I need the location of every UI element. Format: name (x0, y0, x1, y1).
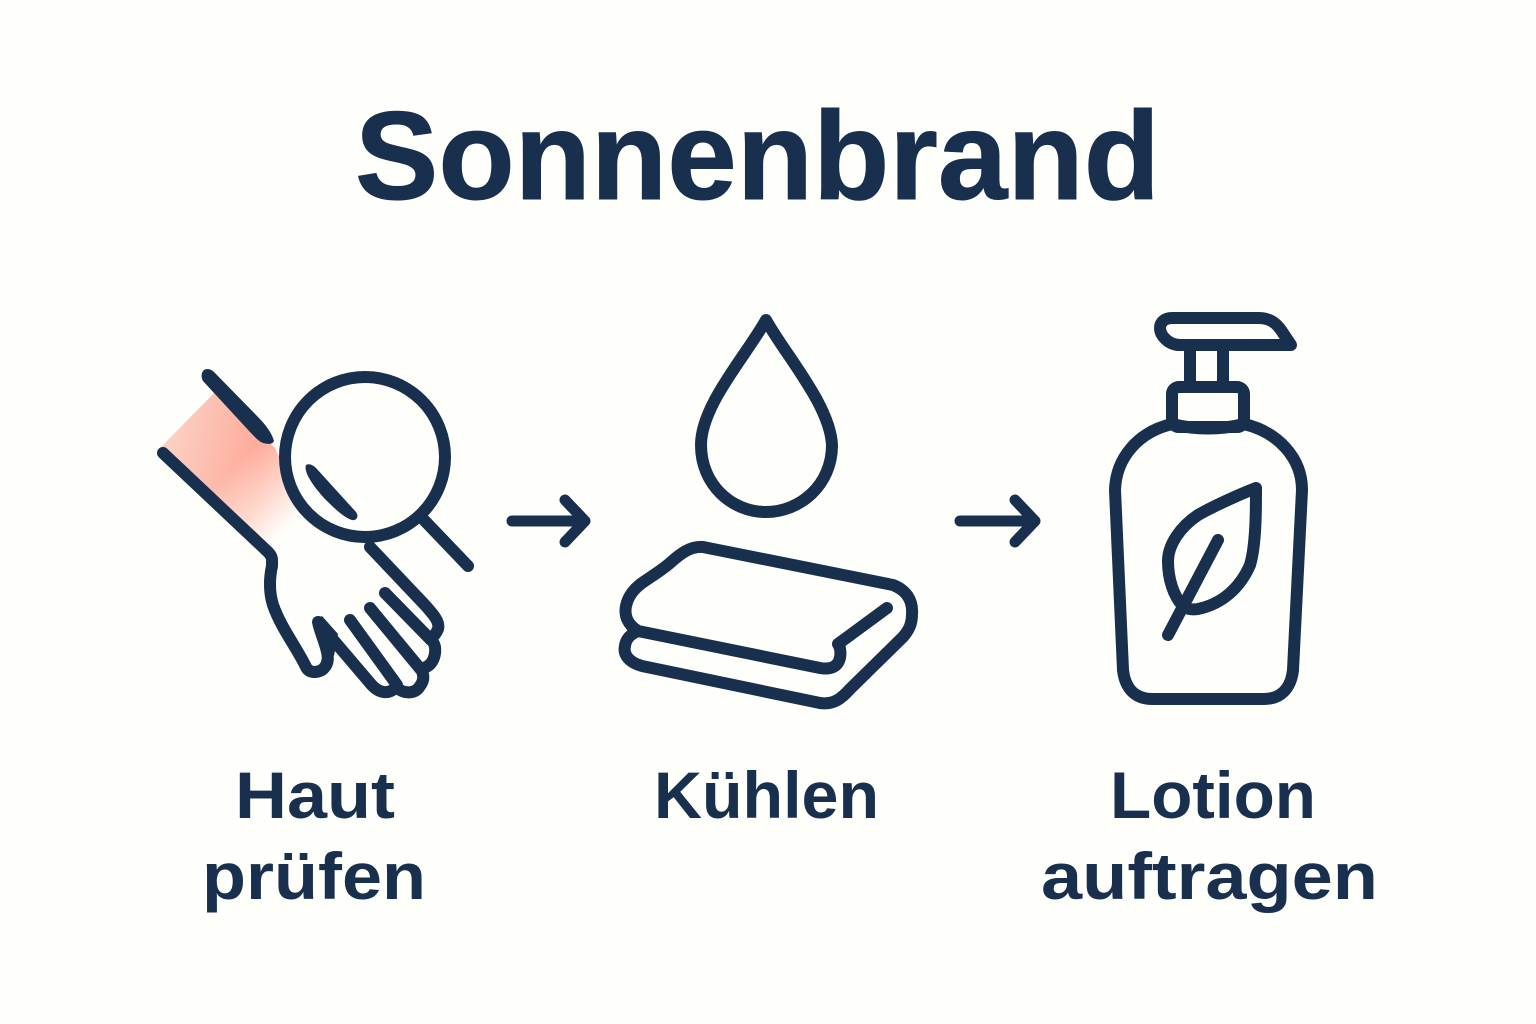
bottle body (1115, 424, 1302, 699)
icon: water drop (701, 320, 832, 512)
label: Haut prüfen: Haut (235, 758, 395, 832)
panel: Haut prüfen (161, 369, 468, 913)
arrow 2 (960, 500, 1035, 542)
magnifying glass (285, 377, 468, 566)
arrow 1 (512, 500, 585, 542)
label: Kühlen: Kühlen (654, 758, 879, 832)
panel: Kühlen (625, 320, 912, 832)
leaf (1168, 488, 1256, 635)
icon: lotion pump bottle with leaf (1115, 318, 1302, 699)
icon: hand with sunburn under magnifying glass (161, 369, 468, 692)
sunburn redness (161, 393, 296, 540)
label: Haut prüfen (202, 758, 426, 913)
label: Haut prüfen: prüfen (202, 839, 426, 913)
label: Lotion auftragen: auftragen (1041, 839, 1378, 913)
label: Lotion auftragen (1041, 758, 1378, 913)
label: Lotion auftragen: Lotion (1110, 758, 1316, 832)
icon: folded towel (625, 547, 912, 703)
collar (1172, 387, 1244, 427)
pump head (1160, 318, 1291, 386)
panel: Lotion auftragen (1041, 318, 1378, 913)
arm and hand outline (163, 369, 438, 692)
title: Sonnenbrand (355, 87, 1160, 226)
